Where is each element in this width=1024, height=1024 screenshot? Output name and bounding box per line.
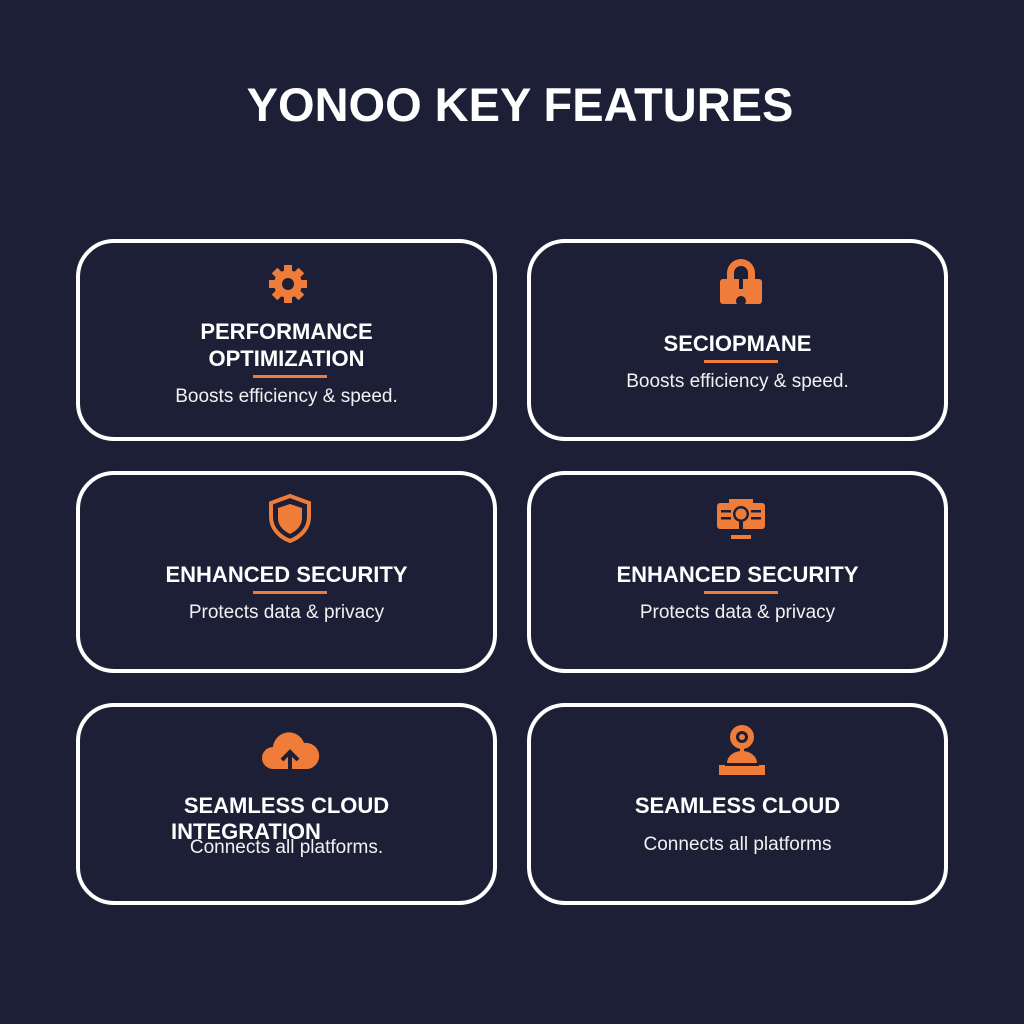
heading: PERFORMANCE	[200, 319, 373, 344]
panel: seamless cloud integration: INTEGRATION	[171, 819, 321, 844]
heading: SECIOPMANE	[664, 331, 811, 356]
heading	[200, 319, 373, 371]
heading: SEAMLESS CLOUD	[635, 793, 840, 818]
panel: enhanced security right	[527, 471, 948, 673]
description: Protects data & privacy	[640, 602, 835, 623]
icon: shield	[269, 494, 311, 543]
panel: seamless cloud integration	[76, 703, 497, 905]
icon: lock	[720, 259, 762, 304]
title: YONOO KEY FEATURES	[247, 78, 793, 131]
heading: OPTIMIZATION	[208, 346, 365, 371]
panel: seamless cloud	[527, 703, 948, 905]
heading: ENHANCED SECURITY	[616, 562, 859, 587]
panel: enhanced security left	[76, 471, 497, 673]
icon: device	[717, 499, 765, 539]
description: Boosts efficiency & speed.	[626, 371, 849, 392]
panel: seciopmane	[527, 239, 948, 441]
description: Boosts efficiency & speed.	[175, 386, 398, 407]
description: Protects data & privacy	[189, 602, 384, 623]
heading: SEAMLESS CLOUD	[184, 793, 389, 818]
heading: ENHANCED SECURITY	[165, 562, 408, 587]
icon: cloud upload	[262, 732, 320, 769]
description: Connects all platforms.	[190, 837, 383, 858]
panel: performance optimization	[76, 239, 497, 441]
icon: gear	[269, 265, 307, 303]
description: Connects all platforms	[644, 834, 831, 855]
icon: webcam	[719, 725, 765, 775]
